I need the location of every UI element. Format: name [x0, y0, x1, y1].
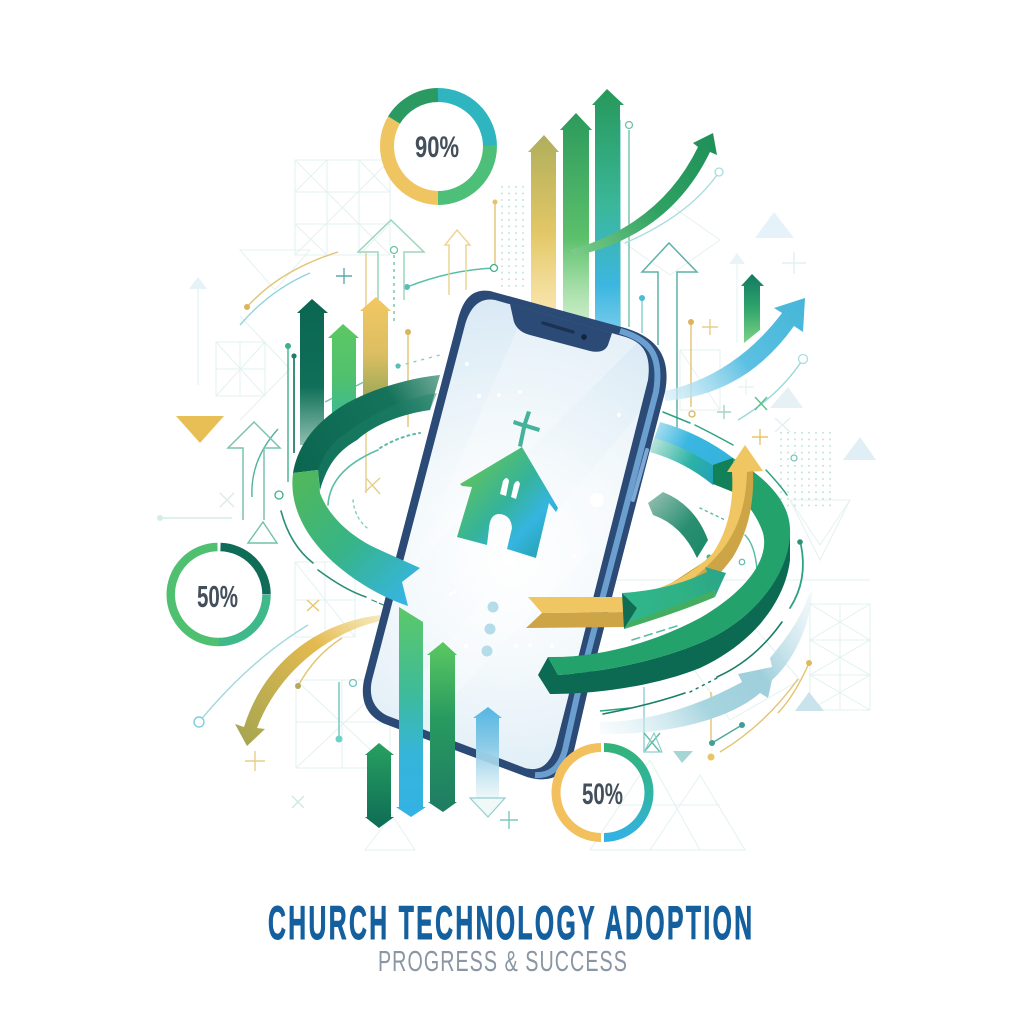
value: 50% [582, 778, 623, 811]
donut chart: 50% bottom [556, 748, 649, 838]
accent dots and plus marks [157, 122, 812, 829]
curved blue arrow [665, 298, 805, 401]
arrow: dark green [297, 299, 328, 445]
screen sparkle dots [449, 362, 621, 648]
thin accent lines [158, 120, 809, 757]
donut chart: 50% left [171, 547, 267, 642]
left rising arrows [297, 297, 391, 445]
arrow: green curved [622, 567, 726, 629]
arrow: dark green double [365, 743, 394, 828]
pale swoosh arrow [600, 590, 812, 734]
church windows [500, 478, 520, 499]
speaker and camera [543, 323, 587, 340]
front ring: left green ribbon [292, 470, 420, 606]
arrow: green double [427, 642, 457, 812]
curved gold arrow [235, 615, 380, 746]
arrow: pale blue up and down [470, 707, 505, 817]
outline arrows [228, 220, 697, 520]
band top face [548, 458, 790, 675]
ring back: inner dark arc [648, 492, 708, 558]
yellow upper face [528, 445, 763, 613]
ring back: right blue segment [650, 422, 733, 485]
top rising arrows [528, 89, 624, 350]
curved green arrow [570, 133, 717, 256]
arrow: gold [528, 135, 559, 312]
title: CHURCH TECHNOLOGY ADOPTION [268, 898, 752, 950]
screen light bands [513, 328, 640, 530]
church building [457, 447, 558, 558]
triangles [176, 212, 876, 763]
donut chart: 90% [387, 95, 490, 198]
yellow lower face [526, 472, 753, 628]
band fold [713, 458, 733, 492]
icon: church [457, 411, 558, 558]
bottom arrows over phone [365, 607, 505, 828]
phone side highlight [535, 331, 658, 775]
ring back: left dark green segment [293, 375, 440, 490]
subtitle: PROGRESS & SUCCESS [378, 946, 627, 978]
arrow: green [560, 113, 592, 322]
band shadow face [538, 530, 790, 694]
value: 90% [415, 131, 459, 164]
arrow: green [328, 324, 359, 420]
front ring: right big green band [538, 458, 790, 694]
decorative geometric grid panels [216, 160, 870, 850]
phone [363, 291, 667, 779]
church cross [513, 411, 540, 447]
value: 50% [197, 579, 238, 614]
arrow: green to blue [592, 89, 624, 350]
pale blue dots on screen [482, 602, 498, 656]
arrow: yellow [360, 297, 391, 400]
notch [510, 304, 612, 352]
dot grids [502, 186, 830, 510]
phone screen [371, 299, 649, 769]
side button [633, 450, 647, 500]
small dark green arrow [741, 274, 764, 343]
infographic canvas [157, 88, 876, 972]
phone body [363, 291, 667, 779]
arrow: yellow curved [526, 445, 763, 628]
arrow: green to blue downward [396, 607, 426, 817]
thin orbit arcs [281, 412, 803, 714]
